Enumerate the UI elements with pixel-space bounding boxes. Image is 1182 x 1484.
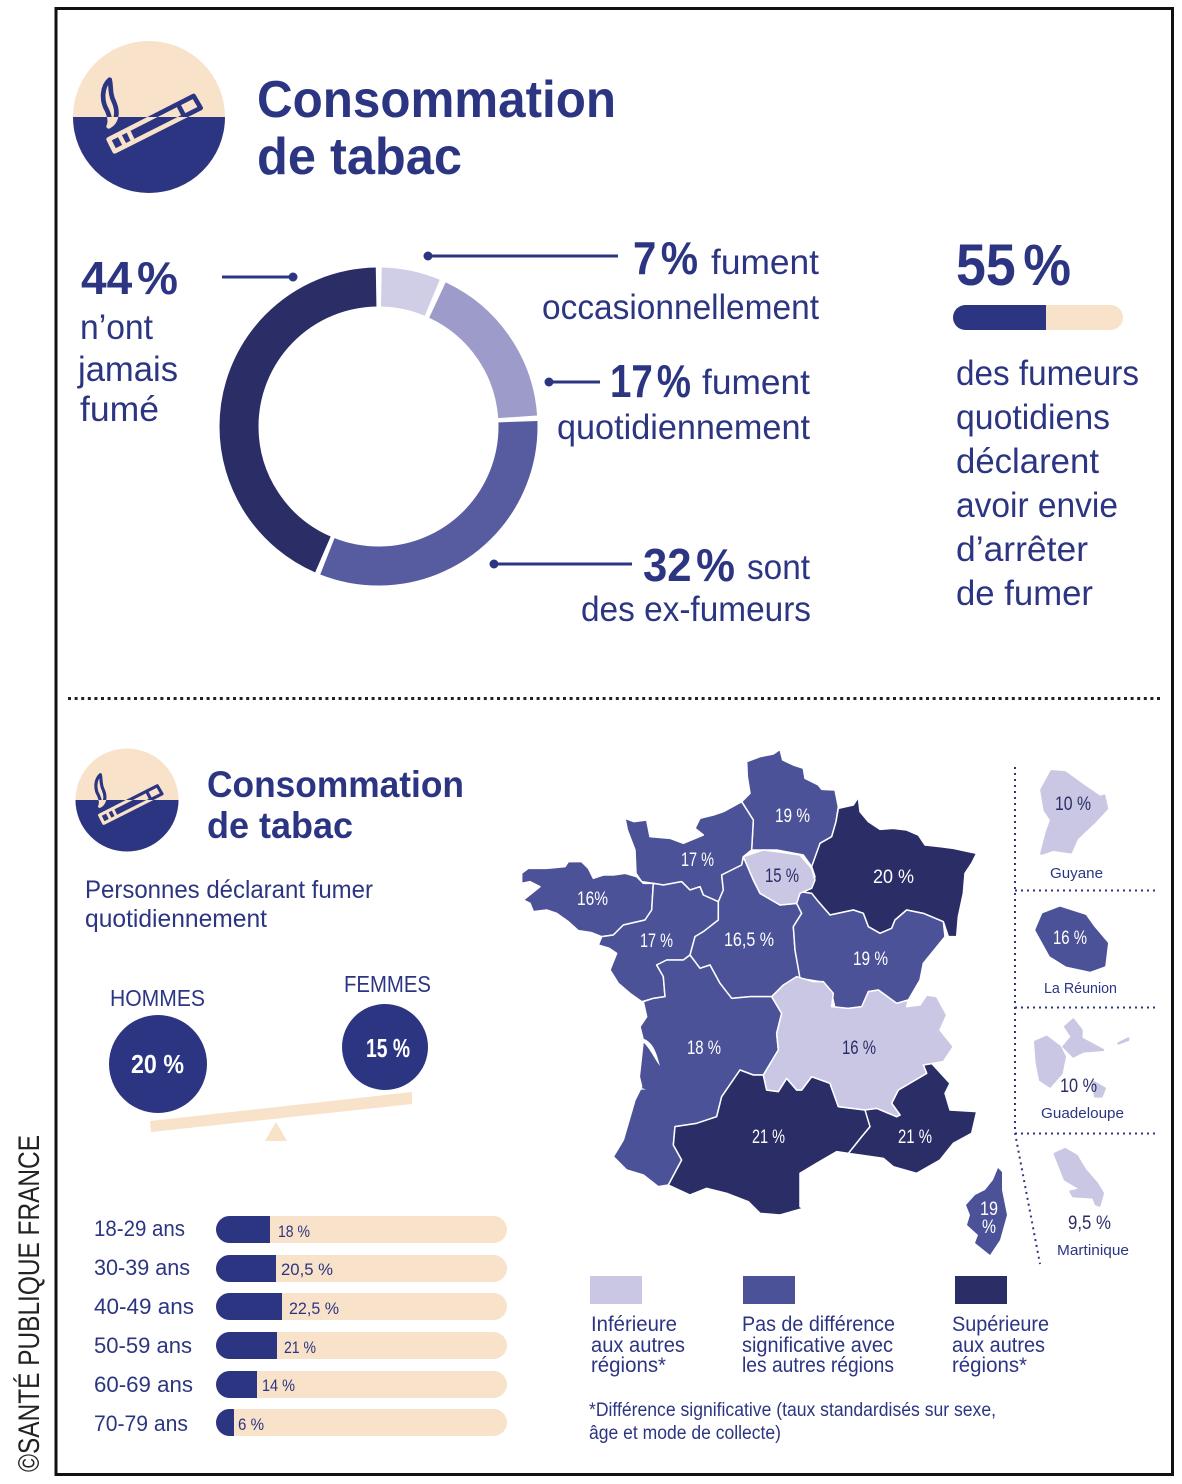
bar: 40-49 ans: 40-49 ans bbox=[94, 1294, 194, 1319]
panel: personnes déclarant fumer bbox=[75, 748, 1157, 1444]
footnote: âge et mode de collecte) bbox=[589, 1423, 781, 1444]
overseas territories bbox=[1015, 767, 1157, 1264]
bar: 50-59 ans bbox=[94, 1332, 507, 1359]
donut chart bbox=[239, 287, 518, 566]
map labels: 16,5 % bbox=[724, 930, 774, 951]
callout: 7 %: fument bbox=[711, 243, 819, 282]
title: de tabac bbox=[257, 128, 462, 186]
map labels bbox=[577, 806, 932, 1148]
bar: 18-29 ans: 18-29 ans bbox=[94, 1216, 185, 1241]
bar: 60-69 ans: 60-69 ans bbox=[94, 1372, 193, 1397]
stat: 55 %: quotidiens bbox=[956, 398, 1110, 437]
footnote bbox=[589, 1400, 996, 1444]
Guyane: 10 % bbox=[1055, 794, 1091, 815]
Martinique: Martinique bbox=[1057, 1242, 1129, 1259]
legend: pas de différence: significative avec bbox=[742, 1334, 893, 1357]
subtitle heading: de tabac bbox=[207, 805, 353, 846]
legend: supérieure: Supérieure bbox=[952, 1313, 1049, 1336]
map labels: 15 % bbox=[765, 866, 799, 887]
legend: inférieure: régions* bbox=[591, 1354, 666, 1377]
balance: hommes / femmes: HOMMES bbox=[110, 985, 205, 1011]
stat: 55 %: avoir envie bbox=[956, 486, 1118, 525]
subtitle heading: Consommation bbox=[207, 764, 464, 805]
footnote: *Différence significative (taux standardisés sur sexe, bbox=[589, 1400, 996, 1421]
description: quotidiennement bbox=[85, 905, 267, 933]
bar: 30-39 ans: 20,5 % bbox=[281, 1260, 333, 1279]
legend: inférieure: Inférieure bbox=[591, 1313, 677, 1336]
legend: inférieure bbox=[590, 1276, 685, 1377]
bar chart: age groups bbox=[94, 1216, 507, 1436]
bar: 70-79 ans bbox=[94, 1409, 507, 1436]
Corse: % bbox=[982, 1217, 996, 1238]
map labels: 19 % bbox=[853, 949, 888, 970]
callout: 32 %: 32 % bbox=[643, 539, 735, 591]
bar: 60-69 ans bbox=[94, 1371, 507, 1398]
stat: 55 % bbox=[953, 233, 1139, 613]
bar: 30-39 ans bbox=[94, 1255, 507, 1282]
legend: supérieure: aux autres bbox=[952, 1334, 1045, 1357]
Corse bbox=[966, 1168, 1007, 1255]
icon: cigarette small bbox=[75, 748, 179, 852]
legend: pas de différence: les autres régions bbox=[742, 1354, 894, 1377]
map labels: 21 % bbox=[752, 1127, 785, 1148]
Guadeloupe bbox=[1035, 1019, 1128, 1122]
bar: 60-69 ans: 14 % bbox=[262, 1376, 295, 1395]
title: Consommation bbox=[257, 71, 616, 129]
credit: ©SANTÉ PUBLIQUE FRANCE bbox=[13, 1135, 46, 1472]
Guyane: Guyane bbox=[1050, 865, 1103, 882]
stat: 55 %: déclarent bbox=[956, 442, 1099, 481]
Martinique bbox=[1055, 1149, 1129, 1259]
bar: 40-49 ans: 22,5 % bbox=[289, 1299, 339, 1318]
description: Personnes déclarant fumer bbox=[85, 876, 373, 904]
legend: supérieure bbox=[952, 1276, 1049, 1377]
bar: 18-29 ans: 18 % bbox=[278, 1222, 310, 1241]
callout: 17 % bbox=[544, 355, 810, 447]
subtitle heading bbox=[207, 764, 464, 846]
title bbox=[257, 71, 616, 186]
map of France regions bbox=[522, 749, 1007, 1255]
legend: pas de différence: Pas de différence bbox=[742, 1313, 895, 1336]
map labels: 18 % bbox=[687, 1038, 721, 1059]
Guyane bbox=[1042, 772, 1107, 882]
Martinique: 9,5 % bbox=[1068, 1213, 1111, 1234]
bar: 70-79 ans: 6 % bbox=[238, 1415, 264, 1434]
callout: 44 % bbox=[77, 252, 298, 429]
callout: 44 %: 44 % bbox=[81, 252, 178, 304]
Guadeloupe: 10 % bbox=[1060, 1076, 1097, 1097]
legend: inférieure: aux autres bbox=[591, 1334, 685, 1357]
map labels: 20 % bbox=[873, 867, 914, 888]
callout: 17 %: 17 % bbox=[610, 355, 691, 407]
callout: 32 %: sont bbox=[747, 548, 810, 587]
description bbox=[85, 876, 373, 933]
map labels: 17 % bbox=[640, 931, 673, 952]
map labels: 16% bbox=[577, 889, 608, 910]
legend: pas de différence bbox=[742, 1276, 895, 1377]
callout: 17 %: quotidiennement bbox=[557, 408, 810, 447]
callout: 32 %: des ex-fumeurs bbox=[581, 590, 811, 629]
balance: hommes / femmes bbox=[109, 971, 431, 1141]
Corse: 19 bbox=[980, 1199, 998, 1220]
callout: 44 %: jamais bbox=[77, 350, 178, 389]
legend bbox=[590, 1276, 1049, 1377]
callout: 7 %: occasionnellement bbox=[542, 288, 819, 327]
bar: 30-39 ans: 30-39 ans bbox=[94, 1255, 190, 1280]
callout: 44 %: fumé bbox=[80, 390, 159, 429]
La Réunion: 16 % bbox=[1053, 928, 1087, 949]
map labels: 17 % bbox=[681, 850, 714, 871]
callout: 32 % bbox=[490, 539, 811, 629]
bar: 50-59 ans: 50-59 ans bbox=[94, 1333, 192, 1358]
balance: hommes / femmes: 20 % bbox=[131, 1049, 184, 1079]
balance: hommes / femmes: FEMMES bbox=[344, 971, 431, 997]
balance: hommes / femmes: 15 % bbox=[366, 1033, 410, 1063]
legend: supérieure: régions* bbox=[952, 1354, 1027, 1377]
callout: 7 %: 7 % bbox=[633, 232, 698, 284]
map labels: 16 % bbox=[842, 1038, 876, 1059]
icon: cigarette bbox=[73, 41, 225, 193]
Guadeloupe: Guadeloupe bbox=[1041, 1105, 1124, 1122]
callout: 7 % bbox=[424, 232, 819, 327]
bar: 70-79 ans: 70-79 ans bbox=[94, 1411, 188, 1436]
bar: 50-59 ans: 21 % bbox=[284, 1338, 316, 1357]
callout: 44 %: n’ont bbox=[80, 308, 153, 347]
stat: 55 %: 55 % bbox=[956, 233, 1071, 298]
stat: 55 %: de fumer bbox=[956, 574, 1093, 613]
callout: 17 %: fument bbox=[702, 363, 810, 402]
map labels: 21 % bbox=[898, 1127, 932, 1148]
stat: 55 %: des fumeurs bbox=[956, 354, 1139, 393]
panel: consommation de tabac overview bbox=[73, 41, 1139, 629]
map labels: 19 % bbox=[775, 806, 810, 827]
La Réunion: La Réunion bbox=[1044, 980, 1117, 997]
La Réunion bbox=[1037, 908, 1117, 997]
bar: 18-29 ans bbox=[94, 1216, 507, 1243]
stat: 55 %: d’arrêter bbox=[956, 530, 1088, 569]
bar: 40-49 ans bbox=[94, 1293, 507, 1320]
